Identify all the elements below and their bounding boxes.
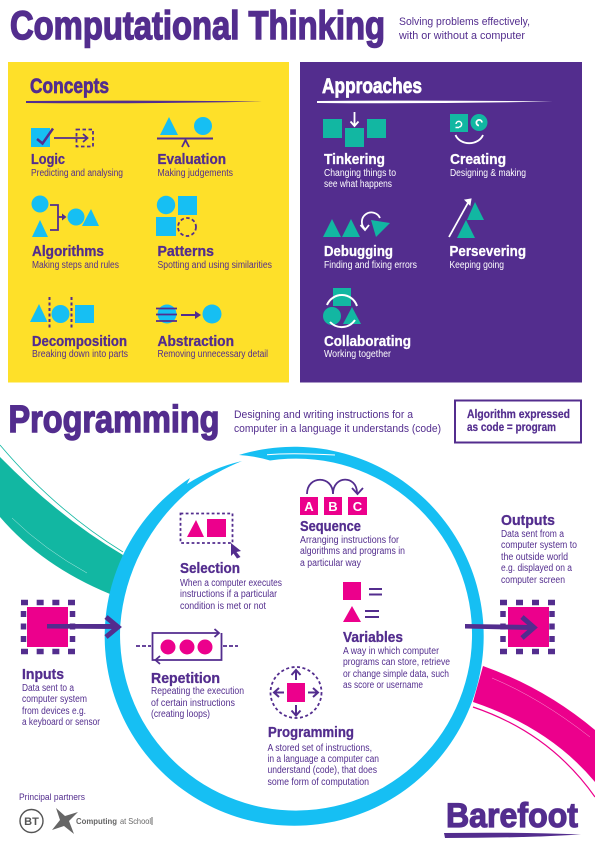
principal partners: [19, 792, 152, 834]
sequence: A: [304, 499, 314, 514]
approach: tinkering: see what happens: [324, 179, 392, 190]
sequence: algorithms and programs in: [300, 546, 405, 557]
selection: condition is met or not: [180, 601, 266, 612]
inputs: computer system: [22, 694, 87, 705]
concept: decomposition: Decomposition: [32, 333, 127, 350]
programming: A stored set of instructions,: [268, 743, 372, 754]
outputs: Data sent from a: [501, 529, 564, 540]
approach: collaborating: Collaborating: [324, 333, 411, 350]
sequence: [300, 480, 405, 569]
concept: evaluation: Evaluation: [158, 151, 226, 168]
variables: programs can store, retrieve: [343, 657, 450, 668]
subtitle: with or without a computer: [398, 30, 525, 42]
concept: logic: [31, 128, 123, 179]
logo: BT: BT: [24, 816, 39, 828]
outputs: the outside world: [501, 552, 568, 563]
blue brush circle: [105, 447, 484, 826]
approach: tinkering: Changing things to: [324, 168, 396, 179]
programming description: computer in a language it understands (code): [234, 423, 441, 435]
subtitle: Solving problems effectively,: [399, 16, 530, 28]
approach: persevering: [449, 199, 526, 271]
programming: [268, 667, 379, 788]
programming: some form of computation: [268, 777, 369, 788]
sequence: Arranging instructions for: [300, 535, 400, 546]
inputs: from devices e.g.: [22, 706, 86, 717]
panel: concepts: [8, 62, 289, 382]
sequence: a particular way: [300, 558, 361, 569]
variables: Variables: [343, 629, 403, 646]
outputs: e.g. displayed on a: [501, 563, 572, 574]
programming description: Designing and writing instructions for a: [234, 409, 414, 421]
concepts heading: Concepts: [30, 74, 109, 98]
concept: patterns: Patterns: [158, 243, 214, 260]
repetition: [136, 629, 244, 720]
approach: collaborating: Working together: [324, 349, 392, 360]
outputs: computer screen: [501, 575, 565, 586]
outputs: [465, 512, 577, 652]
inputs: Data sent to a: [22, 683, 74, 694]
sequence: Sequence: [300, 518, 361, 535]
variables: [343, 582, 450, 691]
approach: creating: Creating: [450, 151, 506, 168]
concept: evaluation: [157, 117, 233, 179]
variables: or change simple data, such: [343, 669, 449, 680]
concept: abstraction: Abstraction: [158, 333, 234, 350]
concept: logic: Logic: [31, 151, 65, 168]
selection: Selection: [180, 560, 240, 577]
concept: algorithms: Making steps and rules: [32, 260, 119, 271]
principal partners: Principal partners: [19, 792, 85, 802]
inputs: a keyboard or sensor: [22, 717, 101, 728]
outputs: Outputs: [501, 512, 555, 529]
arrow: output: [465, 617, 534, 638]
approach: debugging: Debugging: [324, 243, 393, 260]
approach: tinkering: Tinkering: [324, 151, 385, 168]
programming: understand (code), that does: [268, 765, 377, 776]
concept: abstraction: [156, 304, 268, 360]
concept: patterns: Spotting and using similarities: [158, 260, 272, 271]
selection: instructions if a particular: [180, 589, 278, 600]
programming: Programming: [268, 724, 354, 741]
concept: algorithms: Algorithms: [32, 243, 104, 260]
title: Computational Thinking: [10, 4, 385, 48]
sequence: B: [328, 499, 338, 514]
approach: creating: Designing & making: [450, 168, 526, 179]
repetition: Repeating the execution: [151, 686, 244, 697]
inputs: Inputs: [22, 666, 64, 683]
approach: persevering: Keeping going: [450, 260, 504, 271]
callout: algorithm expressed as code: Algorithm expressed: [467, 409, 570, 421]
approach: debugging: [323, 212, 417, 271]
concept: decomposition: [30, 297, 128, 360]
logo: Computing at School: Computing: [76, 816, 117, 826]
approach: creating: [450, 114, 526, 179]
concept: evaluation: Making judgements: [158, 168, 233, 179]
concept: logic: Predicting and analysing: [31, 168, 123, 179]
concept: patterns: [156, 196, 272, 271]
teal swoosh: [0, 445, 123, 594]
repetition: (creating loops): [151, 709, 210, 720]
approach: persevering: Persevering: [450, 243, 526, 260]
approach: collaborating: [323, 288, 411, 360]
concept: abstraction: Removing unnecessary detail: [158, 349, 268, 360]
variables: as score or username: [343, 680, 423, 691]
selection: [180, 514, 282, 612]
outputs: computer system to: [501, 540, 577, 551]
programming: in a language a computer can: [268, 754, 379, 765]
callout: algorithm expressed as code: [455, 400, 581, 442]
concept: decomposition: Breaking down into parts: [32, 349, 128, 360]
subtitle: [398, 16, 530, 42]
selection: When a computer executes: [180, 578, 282, 589]
callout: algorithm expressed as code: as code = program: [467, 422, 556, 434]
programming heading: Programming: [8, 399, 220, 441]
variables: A way in which computer: [343, 646, 440, 657]
arrow: input: [47, 617, 118, 637]
logo: Computing at School: [52, 808, 152, 834]
pink swoosh: [473, 666, 595, 797]
concept: algorithms: [32, 196, 119, 271]
logo: Computing at School: at School: [120, 816, 151, 826]
sequence: C: [353, 499, 363, 514]
logo: Barefoot: Barefoot: [446, 797, 578, 835]
programming description: [234, 409, 441, 435]
panel: approaches: [300, 62, 582, 382]
repetition: Repetition: [151, 670, 220, 687]
approach: tinkering: [323, 112, 396, 190]
repetition: of certain instructions: [151, 698, 235, 709]
inputs: [21, 602, 118, 728]
approach: debugging: Finding and fixing errors: [324, 260, 417, 271]
approaches heading: Approaches: [322, 74, 422, 98]
